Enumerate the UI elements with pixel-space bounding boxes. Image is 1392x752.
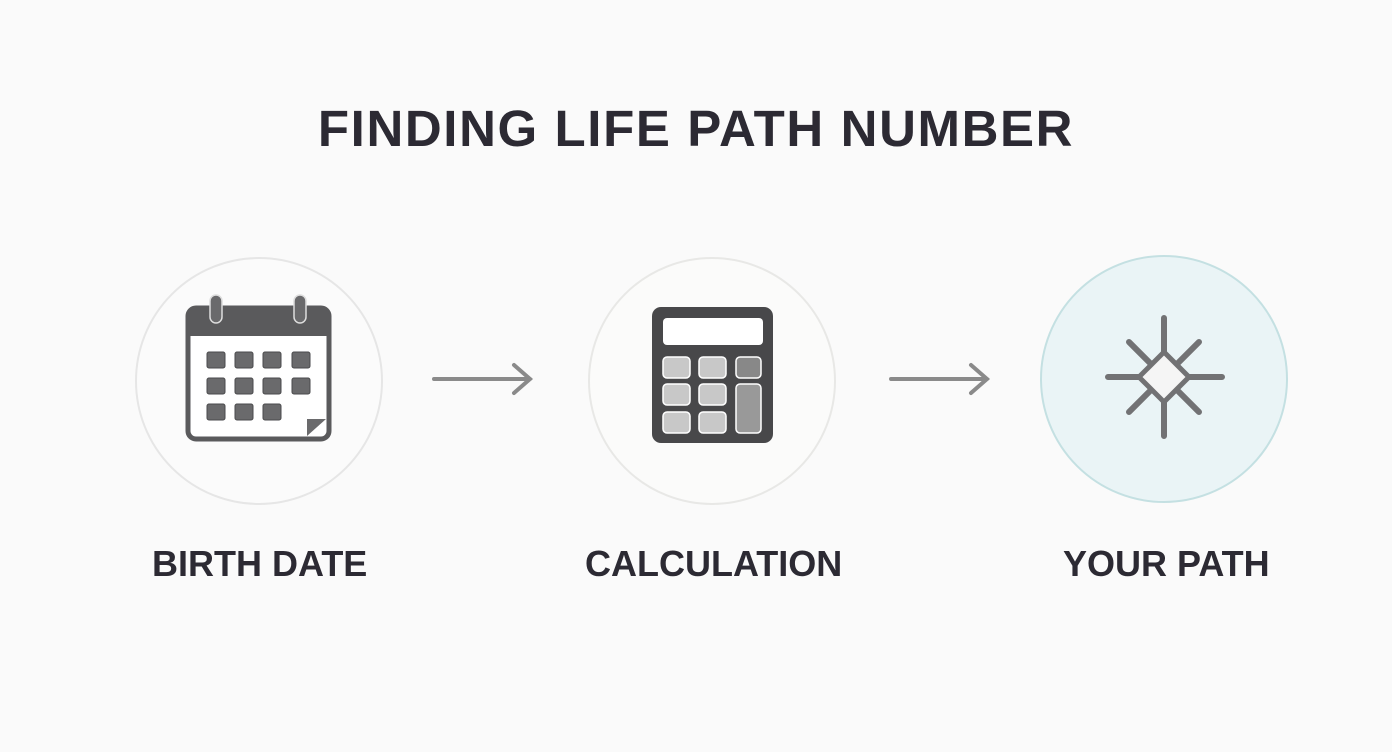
icon: star <box>1108 318 1222 436</box>
arrow 1 <box>434 365 530 393</box>
title: FINDING LIFE PATH NUMBER <box>318 100 1074 157</box>
step: birth date <box>136 258 382 504</box>
icon: calendar <box>188 295 329 439</box>
icon: calculator <box>652 307 773 443</box>
label: your path: YOUR PATH <box>1063 543 1270 584</box>
step: your path <box>1041 256 1287 502</box>
arrow 2 <box>891 365 987 393</box>
label: calculation: CALCULATION <box>585 543 842 584</box>
label: birth date: BIRTH DATE <box>152 543 367 584</box>
step: calculation <box>589 258 835 504</box>
